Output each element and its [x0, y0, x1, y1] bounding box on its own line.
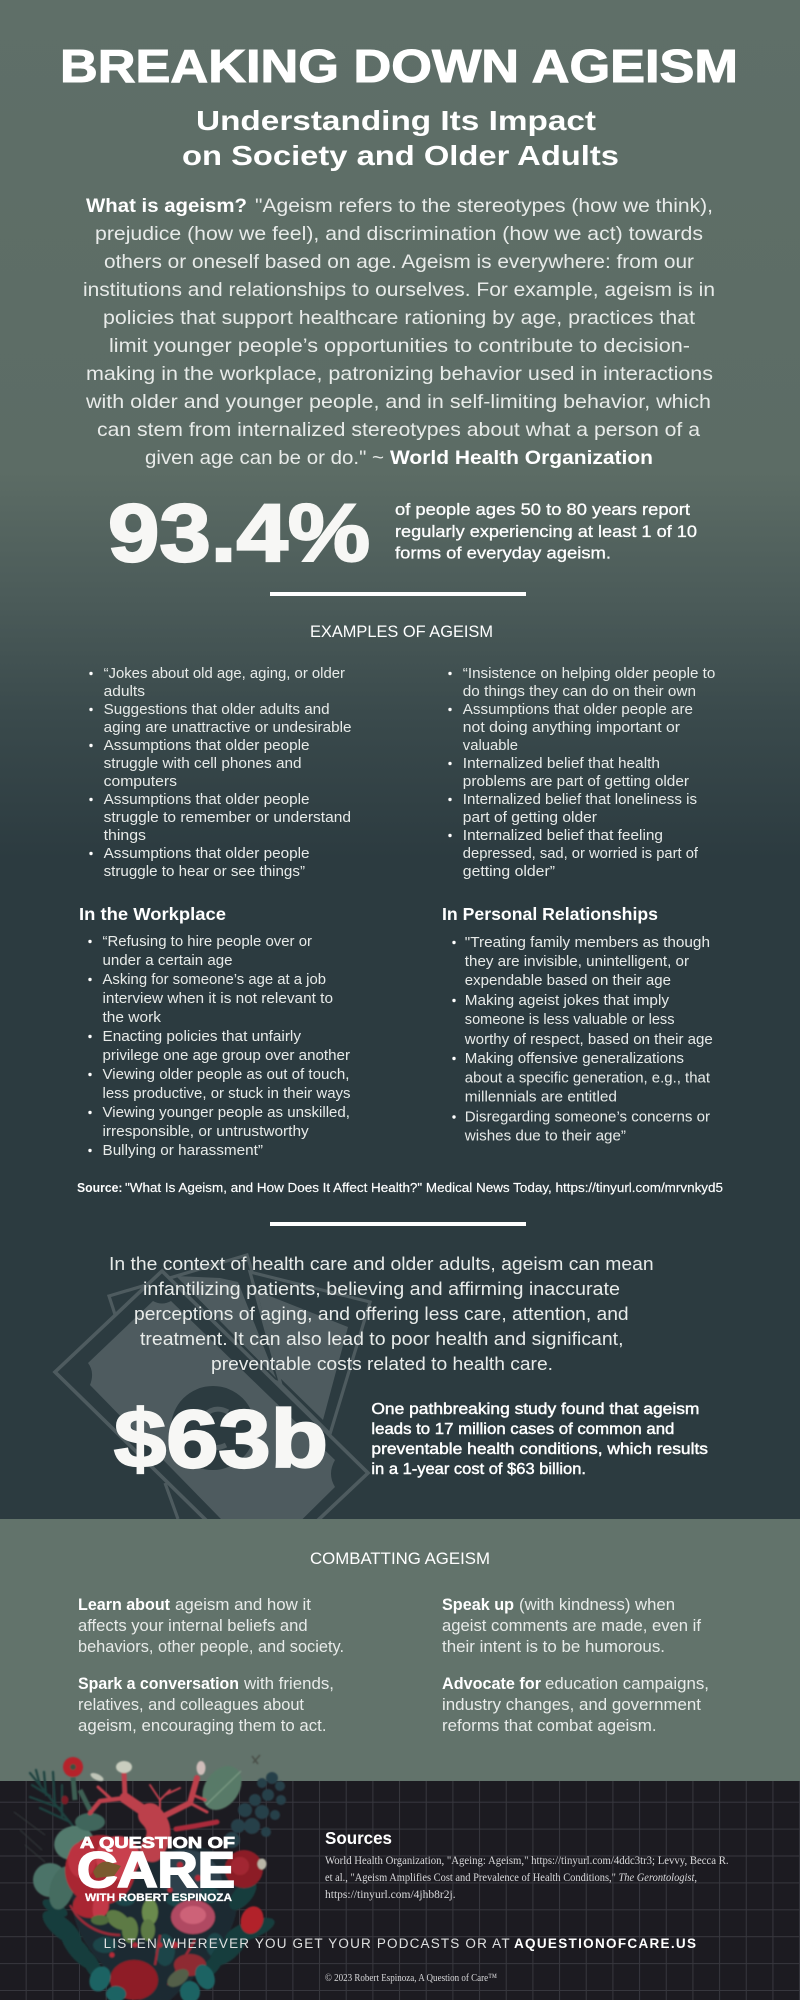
text block: health care context: treatment. It can also lead to poor health and significant,: [140, 1328, 624, 1349]
foliage left dark: [37, 1896, 107, 1984]
list: personal relationships: [452, 934, 713, 1144]
list: personal relationships: Making ageist jokes that imply: [465, 992, 670, 1009]
heading: combatting ageism: COMBATTING AGEISM: [310, 1549, 490, 1568]
action: spark a conversation: Spark a conversation: [78, 1675, 239, 1693]
action: advocate for: industry changes, and government: [442, 1696, 701, 1714]
list: general examples right: Internalized belief that health: [463, 756, 660, 772]
logo: wordmark: CARE: [77, 1842, 235, 1898]
eucalyptus right: [224, 1772, 286, 1848]
list: general examples left: computers: [104, 774, 177, 790]
fern left: [30, 1770, 76, 1830]
list: general examples left: things: [104, 828, 146, 844]
bottom red rose: [110, 1960, 158, 2000]
text block: what is ageism: "Ageism refers to the stereotypes (how we think),: [255, 195, 713, 217]
call to action: listen: LISTEN WHEREVER YOU GET YOUR PODCASTS OR AT: [104, 1936, 510, 1951]
list: general examples right: depressed, sad, or worried is part of: [463, 846, 699, 862]
text block: what is ageism: can stem from internalized stereotypes about what a person of a: [97, 419, 700, 441]
list: general examples right: getting older”: [463, 864, 555, 880]
panel: gradient background: [0, 0, 800, 1519]
action: learn about: Learn about: [78, 1596, 170, 1614]
heading: examples of ageism: EXAMPLES OF AGEISM: [310, 623, 493, 641]
list: personal relationships: wishes due to their age”: [464, 1128, 626, 1144]
list: workplace: Viewing older people as out of touch,: [102, 1066, 350, 1083]
teal leaves bottom: [85, 1961, 219, 2000]
list: general examples left: Suggestions that older adults and: [104, 702, 330, 718]
action: spark a conversation: ageism, encouraging them to act.: [78, 1717, 326, 1735]
icon: money bills: [55, 1255, 370, 1574]
top red flower: [63, 1757, 83, 1777]
green top leaf: [194, 1759, 250, 1817]
list: workplace: the work: [102, 1009, 162, 1026]
list: workplace: interview when it is not relevant to: [102, 990, 333, 1007]
text block: health care context: [109, 1253, 654, 1374]
subtitle: [182, 105, 619, 171]
list: general examples right: problems are part of getting older: [463, 774, 689, 790]
stat description: forms of everyday ageism.: [395, 544, 611, 562]
source line: "What Is Ageism, and How Does It Affect Health?" Medical News Today, https://tinyurl.com/mrvnkyd5: [125, 1181, 723, 1195]
copyright: © 2023 Robert Espinoza, A Question of Care™: [325, 1972, 497, 1984]
list: general examples left: Assumptions that older people: [104, 846, 310, 862]
list: workplace: Asking for someone’s age at a job: [102, 971, 326, 988]
list: general examples left: Assumptions that older people: [104, 738, 310, 754]
insect: [252, 1755, 260, 1764]
list: general examples left: [89, 666, 352, 880]
action: advocate for: Advocate for: [442, 1675, 542, 1693]
sources text: [325, 1855, 729, 1901]
list: general examples right: Assumptions that older people are: [463, 702, 693, 718]
cost description: [371, 1401, 708, 1478]
list: workplace: privilege one age group over another: [102, 1047, 350, 1064]
heading: in personal relationships: In Personal Relationships: [442, 904, 658, 924]
list: workplace: irresponsible, or untrustworthy: [102, 1123, 309, 1140]
logo: wordmark: A QUESTION OF: [80, 1835, 235, 1852]
heart body: [72, 1846, 238, 2000]
action: spark a conversation: [78, 1675, 334, 1735]
text block: what is ageism: policies that support healthcare rationing by age, practices that: [103, 307, 696, 329]
list: workplace: less productive, or stuck in their ways: [102, 1085, 350, 1102]
heart dark foliage texture: [93, 1887, 224, 1966]
list: general examples right: do things they can do on their own: [463, 684, 696, 700]
text block: what is ageism: World Health Organization: [390, 447, 653, 469]
call to action: listen: [104, 1936, 696, 1951]
sources text: et al., "Ageism Amplifies Cost and Prevalence of Health Conditions," The Gerontologist,: [325, 1872, 697, 1884]
action: speak up: [442, 1596, 701, 1656]
list: personal relationships: about a specific generation, e.g., that: [465, 1070, 711, 1086]
cost description: One pathbreaking study found that ageism: [371, 1401, 699, 1418]
action: speak up: their intent is to be humorous.: [442, 1638, 665, 1656]
list: personal relationships: "Treating family members as though: [465, 934, 710, 951]
list: personal relationships: worthy of respect, based on their age: [464, 1031, 713, 1048]
text block: what is ageism: others or oneself based on age. Ageism is everywhere: from our: [104, 251, 695, 273]
list: general examples right: part of getting older: [463, 810, 597, 826]
list: general examples left: struggle to remember or understand: [104, 810, 351, 826]
list: general examples right: not doing anything important or: [463, 720, 680, 736]
action: advocate for: education campaigns,: [545, 1675, 709, 1693]
cost description: leads to 17 million cases of common and: [371, 1421, 674, 1438]
list: general examples right: “Insistence on helping older people to: [463, 666, 715, 682]
text block: what is ageism: with older and younger people, and in self-limiting behavior, which: [85, 391, 711, 413]
list: personal relationships: millennials are entitled: [465, 1088, 617, 1106]
action: spark a conversation: relatives, and colleagues about: [78, 1696, 304, 1714]
tulip: [237, 1903, 267, 1937]
list: general examples left: struggle to hear or see things”: [104, 864, 305, 880]
heart inner greens: [91, 1899, 158, 1943]
big number: 93.4%: 93.4%: [108, 488, 370, 579]
list: general examples left: aging are unattractive or undesirable: [104, 720, 351, 736]
artery: [90, 1772, 217, 1850]
logo: wordmark: WITH ROBERT ESPINOZA: [85, 1892, 232, 1904]
action: advocate for: [442, 1675, 709, 1735]
subtitle: on Society and Older Adults: [182, 140, 619, 171]
text block: what is ageism: making in the workplace, patronizing behavior used in interactions: [86, 363, 713, 385]
heart lower branches: [70, 1905, 195, 1985]
list: general examples left: struggle with cell phones and: [104, 756, 302, 772]
subtitle: Understanding Its Impact: [196, 105, 596, 136]
panel: combatting ageism: [0, 1519, 800, 1781]
logo: heart illustration: [14, 1755, 286, 2000]
action: speak up: (with kindness) when: [519, 1596, 675, 1614]
pink flower: [171, 1900, 215, 1934]
call to action: listen: AQUESTIONOFCARE.US: [514, 1936, 696, 1951]
action: spark a conversation: with friends,: [243, 1675, 334, 1693]
big number: $63b: $63b: [114, 1394, 328, 1485]
text block: health care context: preventable costs related to health care.: [211, 1353, 553, 1374]
action: speak up: Speak up: [442, 1596, 514, 1614]
list: general examples left: adults: [104, 684, 145, 700]
red specks: [110, 1862, 201, 1958]
list: general examples right: [448, 666, 715, 880]
action: learn about: [78, 1596, 344, 1656]
list: personal relationships: Making offensive generalizations: [465, 1050, 684, 1067]
action: speak up: ageist comments are made, even if: [442, 1617, 701, 1635]
foliage right dark: [194, 1875, 278, 1984]
text block: health care context: infantilizing patients, believing and affirming inaccurate: [143, 1278, 620, 1299]
list: workplace: Bullying or harassment”: [102, 1142, 263, 1159]
stat description: [395, 501, 697, 562]
list: workplace: [88, 933, 351, 1159]
list: personal relationships: expendable based on their age: [465, 972, 671, 989]
list: workplace: under a certain age: [102, 952, 232, 969]
list: workplace: “Refusing to hire people over or: [102, 933, 312, 950]
text block: what is ageism: prejudice (how we feel), and discrimination (how we act) towards: [95, 223, 703, 245]
action: learn about: behaviors, other people, and society.: [78, 1638, 344, 1656]
sources heading: Sources: [325, 1828, 392, 1848]
text block: what is ageism: limit younger people’s opportunities to contribute to decision-: [109, 335, 690, 357]
list: workplace: Viewing younger people as unskilled,: [102, 1104, 350, 1121]
list: general examples right: Internalized belief that feeling: [463, 828, 663, 844]
white buds: [116, 1761, 132, 1773]
text block: what is ageism: [83, 195, 715, 469]
action: learn about: affects your internal beliefs and: [78, 1617, 308, 1635]
panel: footer background: [0, 1781, 800, 2000]
text block: health care context: perceptions of aging, and offering less care, attention, and: [134, 1303, 629, 1324]
stat description: of people ages 50 to 80 years report: [395, 501, 690, 519]
text block: what is ageism: institutions and relationships to ourselves. For example, ageism is in: [83, 279, 715, 301]
text block: health care context: In the context of health care and older adults, ageism can mean: [109, 1253, 654, 1274]
list: personal relationships: someone is less valuable or less: [465, 1011, 674, 1028]
sources text: https://tinyurl.com/4jhb8r2j.: [325, 1889, 456, 1901]
list: general examples right: valuable: [463, 738, 518, 754]
right rose: [225, 1850, 263, 1888]
title: BREAKING DOWN AGEISM: [60, 40, 738, 92]
cost description: in a 1-year cost of $63 billion.: [371, 1461, 586, 1478]
sage leaves: [33, 1813, 105, 1912]
heading: in the workplace: In the Workplace: [79, 904, 226, 924]
list: workplace: Enacting policies that unfairly: [102, 1028, 302, 1045]
source line: Source:: [77, 1181, 122, 1195]
sources text: World Health Organization, "Ageing: Ageism," https://tinyurl.com/4ddc3tr3; Levvy, Becca R.: [325, 1855, 729, 1867]
list: general examples right: Internalized belief that loneliness is: [463, 792, 697, 808]
stat description: regularly experiencing at least 1 of 10: [395, 523, 697, 541]
cost description: preventable health conditions, which results: [371, 1441, 708, 1458]
list: general examples left: Assumptions that older people: [104, 792, 310, 808]
action: learn about: ageism and how it: [175, 1596, 311, 1614]
big red flower: [65, 1835, 135, 1905]
list: personal relationships: they are invisible, unintelligent, or: [465, 953, 689, 970]
action: advocate for: reforms that combat ageism.: [442, 1717, 657, 1735]
list: general examples left: “Jokes about old age, aging, or older: [104, 666, 345, 682]
text block: what is ageism: given age can be or do." ~: [145, 447, 384, 469]
list: personal relationships: Disregarding someone’s concerns or: [465, 1108, 710, 1126]
text block: what is ageism: What is ageism?: [86, 195, 247, 217]
